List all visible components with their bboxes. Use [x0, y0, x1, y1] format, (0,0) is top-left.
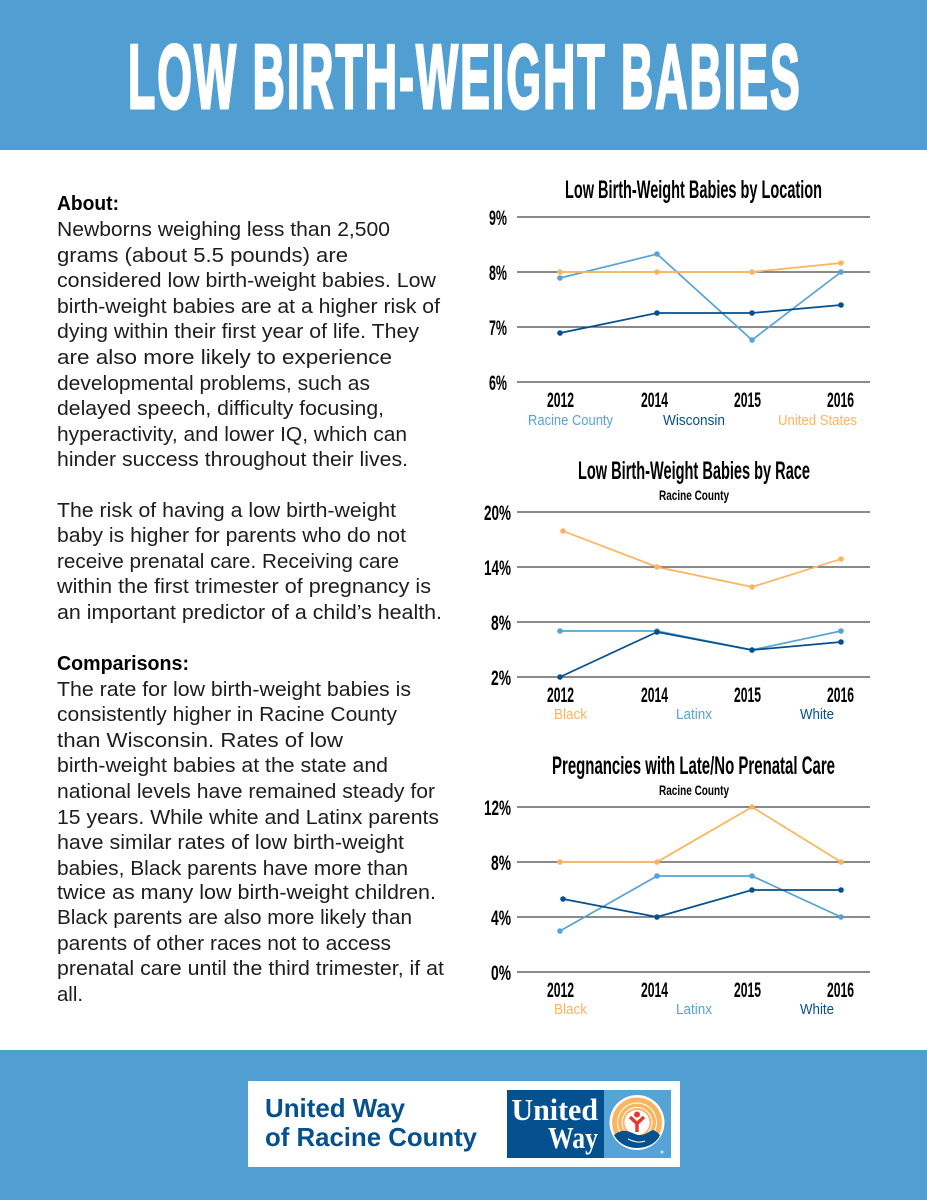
chart: low birth-weight babies by location: 9% — [489, 207, 507, 230]
text block: comparisons: 15 years. While white and Latinx parents — [57, 807, 439, 829]
text block: comparisons: parents of other races not to access — [57, 933, 391, 955]
chart: low birth-weight babies by race: 2015 — [734, 684, 761, 707]
chart: low birth-weight babies by race: 2012 — [547, 684, 574, 707]
line: Black — [558, 805, 843, 864]
line: White — [561, 888, 843, 919]
chart: low birth-weight babies by race: White — [800, 706, 834, 723]
text block: about: hyperactivity, and lower IQ, which can — [57, 424, 407, 446]
text block: comparisons: Black parents are also more likely than — [57, 907, 412, 929]
chart: low birth-weight babies by race: Latinx — [676, 706, 712, 723]
chart: low birth-weight babies by race: 2% — [491, 667, 511, 690]
text block: comparisons: consistently higher in Racine County — [57, 704, 397, 726]
text block: comparisons: babies, Black parents have more than — [57, 858, 408, 880]
line: White — [558, 630, 843, 679]
header banner — [0, 0, 927, 150]
text block: comparisons: prenatal care until the third trimester, if at — [57, 958, 444, 980]
chart: pregnancies with late or no prenatal care: 12% — [484, 797, 511, 820]
text block: about: developmental problems, such as — [57, 373, 370, 395]
text block: prenatal care risk — [56, 500, 442, 624]
chart: low birth-weight babies by race: Racine County — [659, 487, 729, 503]
text block: about: About: — [57, 193, 119, 215]
text block: about: grams (about 5.5 pounds) are — [57, 245, 348, 267]
text block: prenatal care risk: an important predictor of a child’s health. — [57, 602, 442, 624]
text block: prenatal care risk: baby is higher for parents who do not — [57, 525, 406, 547]
chart: low birth-weight babies by location: United States — [778, 412, 857, 429]
logo card — [248, 1081, 680, 1167]
text block: about: considered low birth-weight babies. Low — [57, 270, 437, 292]
chart: pregnancies with late or no prenatal care: Latinx — [676, 1001, 712, 1018]
text block: comparisons: all. — [57, 984, 83, 1006]
text block: about: Newborns weighing less than 2,500 — [57, 219, 390, 241]
logo card: United Way — [265, 1093, 406, 1123]
line: United States — [558, 261, 843, 274]
title: LOW BIRTH-WEIGHT BABIES — [128, 27, 800, 128]
text block: about: are also more likely to experience — [57, 347, 392, 369]
text block: prenatal care risk: within the first trimester of pregnancy is — [56, 576, 431, 598]
chart: pregnancies with late or no prenatal care: Racine County — [659, 782, 729, 798]
chart: low birth-weight babies by location: 8% — [489, 262, 507, 285]
text block: about: delayed speech, difficulty focusing, — [57, 398, 384, 420]
chart: low birth-weight babies by location — [489, 176, 870, 429]
chart: low birth-weight babies by race: 2016 — [827, 684, 854, 707]
icon: United Way logo: Way — [548, 1120, 598, 1155]
logo card: of Racine County — [265, 1122, 478, 1152]
text block: comparisons — [57, 653, 444, 1006]
line: Latinx — [558, 629, 843, 652]
text block: about: dying within their first year of life. They — [57, 321, 419, 343]
chart: low birth-weight babies by race: 14% — [484, 557, 511, 580]
chart: pregnancies with late or no prenatal care: 0% — [491, 962, 511, 985]
chart: low birth-weight babies by location: 2014 — [641, 389, 668, 412]
line: Racine County — [558, 252, 843, 342]
chart: pregnancies with late or no prenatal care: 2012 — [547, 979, 574, 1002]
chart: low birth-weight babies by location: 6% — [489, 372, 507, 395]
icon: United Way logo — [507, 1090, 671, 1158]
chart: low birth-weight babies by race — [484, 457, 870, 723]
line: Latinx — [558, 874, 843, 933]
chart: low birth-weight babies by location: 7% — [489, 317, 507, 340]
chart: pregnancies with late or no prenatal care: 2016 — [827, 979, 854, 1002]
footer banner — [0, 1050, 927, 1200]
chart: low birth-weight babies by location: Wisconsin — [663, 412, 725, 429]
text block: prenatal care risk: receive prenatal care. Receiving care — [57, 551, 399, 573]
chart: low birth-weight babies by race: 8% — [491, 612, 511, 635]
chart: pregnancies with late or no prenatal care: 8% — [491, 852, 511, 875]
text block: about — [57, 193, 440, 471]
chart: low birth-weight babies by location: 2016 — [827, 389, 854, 412]
line: Wisconsin — [558, 303, 843, 335]
text block: comparisons: Comparisons: — [57, 653, 189, 675]
icon: United Way logo: United — [512, 1092, 598, 1127]
chart: low birth-weight babies by location: 2012 — [547, 389, 574, 412]
chart: low birth-weight babies by location: 2015 — [734, 389, 761, 412]
chart: pregnancies with late or no prenatal care: 2014 — [641, 979, 668, 1002]
text block: comparisons: twice as many low birth-weight children. — [57, 882, 436, 904]
chart: pregnancies with late or no prenatal care — [484, 752, 870, 1018]
text block: comparisons: The rate for low birth-weight babies is — [57, 679, 411, 701]
chart: pregnancies with late or no prenatal care: Black — [554, 1001, 587, 1018]
text block: prenatal care risk: The risk of having a low birth-weight — [57, 500, 396, 522]
text block: comparisons: birth-weight babies at the state and — [57, 755, 388, 777]
text block: comparisons: national levels have remained steady for — [57, 781, 435, 803]
text block: comparisons: than Wisconsin. Rates of low — [57, 730, 344, 752]
text block: about: birth-weight babies are at a higher risk of — [57, 296, 440, 318]
line: Black — [561, 529, 843, 589]
chart: low birth-weight babies by race: 2014 — [641, 684, 668, 707]
chart: pregnancies with late or no prenatal care: White — [800, 1001, 834, 1018]
chart: low birth-weight babies by race: Black — [554, 706, 587, 723]
text block: comparisons: have similar rates of low birth-weight — [57, 832, 404, 854]
chart: low birth-weight babies by race: 20% — [484, 502, 511, 525]
chart: low birth-weight babies by location: Racine County — [528, 412, 613, 429]
chart: pregnancies with late or no prenatal care: 4% — [491, 907, 511, 930]
text block: about: hinder success throughout their lives. — [57, 449, 408, 471]
chart: pregnancies with late or no prenatal care: 2015 — [734, 979, 761, 1002]
